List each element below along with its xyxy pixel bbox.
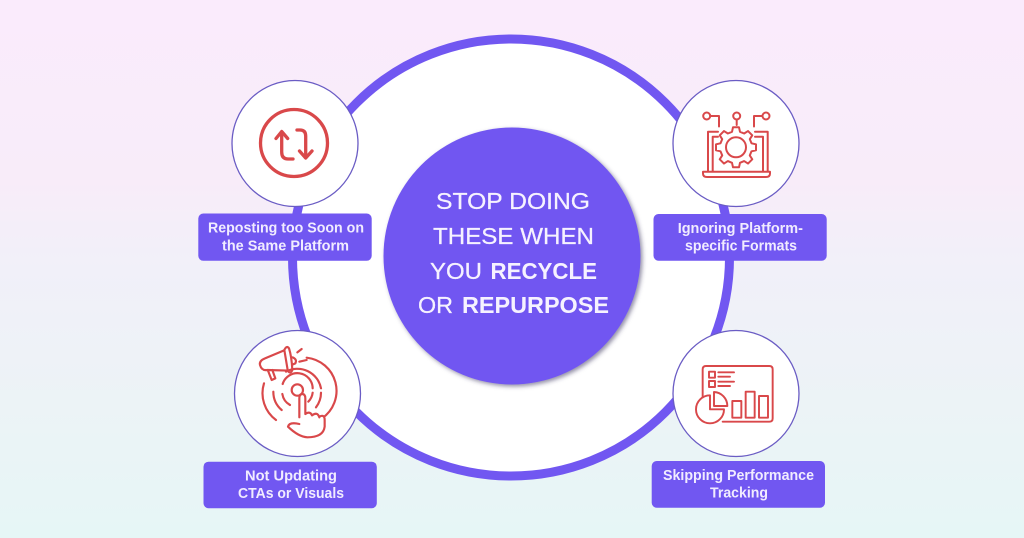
title: OR	[418, 292, 453, 318]
title: THESE WHEN	[433, 223, 594, 249]
label text: CTAs or Visuals	[238, 486, 344, 502]
label text	[238, 469, 344, 502]
title	[418, 188, 609, 318]
label text	[208, 221, 364, 255]
icon: repost arrows	[260, 110, 328, 176]
label text	[663, 468, 814, 502]
label text: Skipping Performance	[663, 468, 814, 484]
title: RECYCLE	[490, 258, 597, 284]
title: YOU	[430, 258, 482, 284]
panel: skipping performance tracking	[652, 330, 825, 508]
large ring	[292, 39, 730, 476]
label text: Reposting too Soon on	[208, 221, 364, 237]
center circle with title	[384, 128, 640, 384]
label text: Tracking	[710, 486, 768, 502]
label text: specific Formats	[685, 238, 797, 254]
icon: megaphone, target and pointer	[260, 347, 337, 437]
label text: Ignoring Platform-	[678, 221, 803, 237]
title: REPURPOSE	[462, 292, 609, 318]
panel: reposting too soon	[198, 80, 372, 261]
label box	[654, 214, 827, 261]
label text	[678, 221, 803, 254]
icon: laptop with gear	[703, 112, 770, 177]
label box	[204, 462, 377, 508]
label box	[198, 214, 372, 261]
label text: Not Updating	[245, 469, 337, 485]
panel: not updating CTAs	[204, 330, 377, 508]
title: STOP DOING	[436, 188, 590, 214]
icon: dashboard with pie and bars	[696, 366, 773, 423]
label box	[652, 461, 825, 508]
label text: the Same Platform	[222, 239, 349, 255]
panel: ignoring platform formats	[654, 80, 827, 261]
